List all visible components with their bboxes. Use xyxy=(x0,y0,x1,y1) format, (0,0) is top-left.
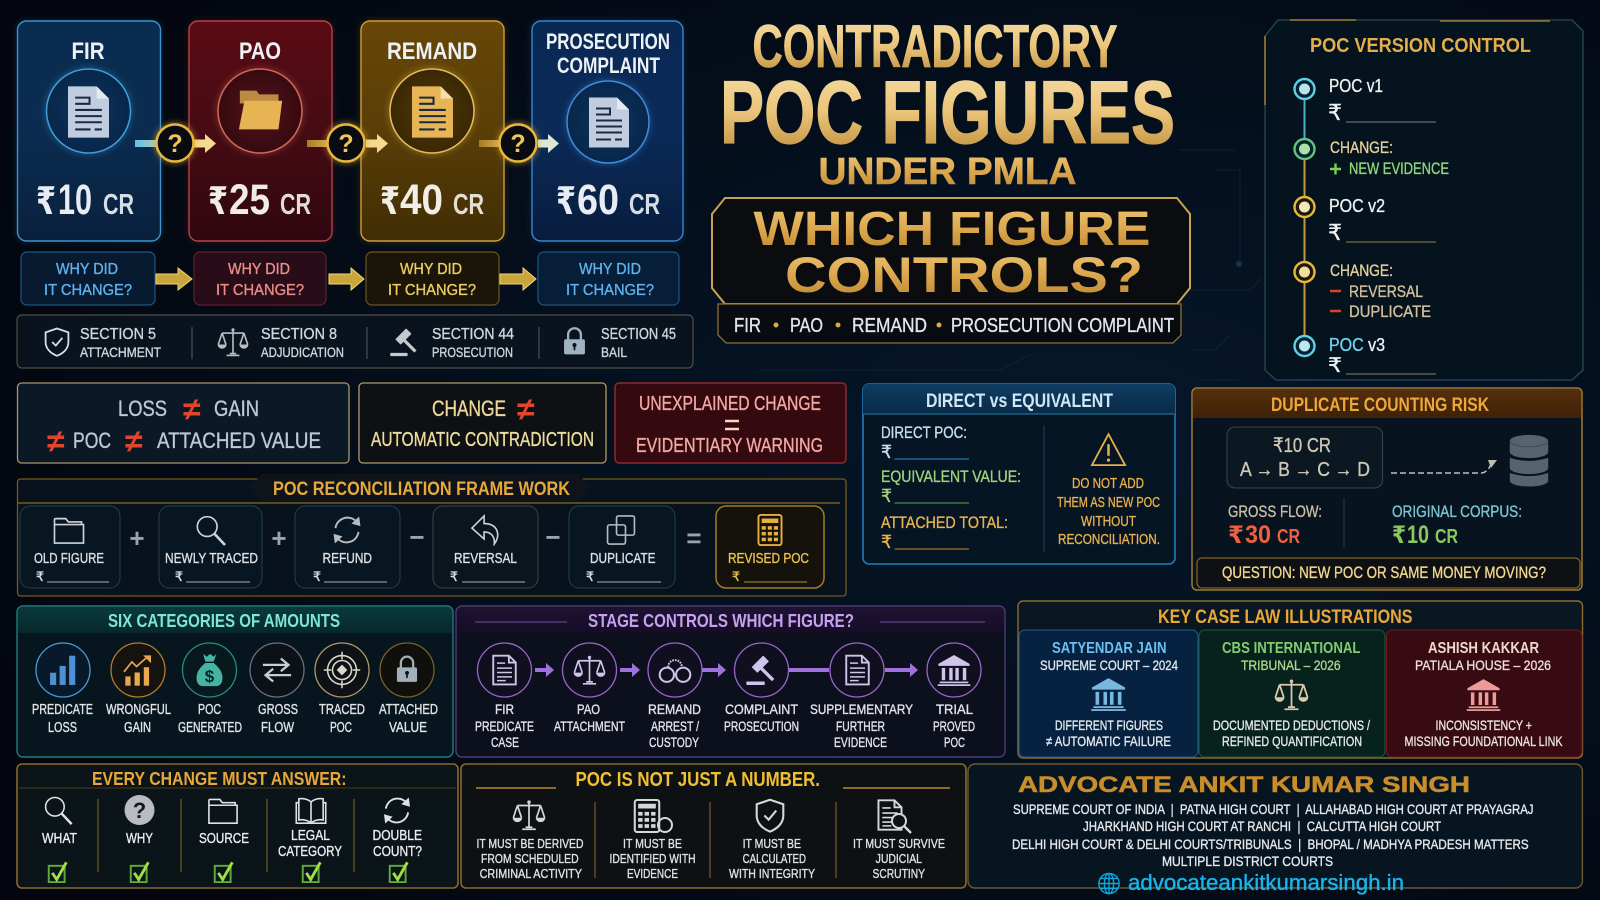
heading: PAO: PAO xyxy=(239,38,281,65)
heading: KEY CASE LAW ILLUSTRATIONS xyxy=(1158,607,1412,628)
case: Satyendar Jain: ≠ AUTOMATIC FAILURE xyxy=(1046,733,1171,749)
item: double count xyxy=(372,797,422,882)
stage: supplementary: SUPPLEMENTARY xyxy=(810,701,914,717)
item: double count: DOUBLE xyxy=(372,827,422,844)
field: direct POC: DIRECT POC: xyxy=(881,423,967,442)
heading: POC VERSION CONTROL xyxy=(1310,35,1531,57)
item: source: SOURCE xyxy=(199,830,249,847)
case: Ashish Kakkar: INCONSISTENCY + xyxy=(1436,717,1532,733)
step: refund: REFUND xyxy=(322,550,372,567)
item: traced POC: TRACED xyxy=(319,702,365,718)
box: loss gain: ≠ xyxy=(125,423,143,459)
operators: − xyxy=(409,522,425,552)
heading: prosecution complaint xyxy=(546,29,670,78)
why box: REMAND: WHY DID xyxy=(400,261,462,278)
step: old figure: OLD FIGURE xyxy=(34,550,104,567)
arrow: why 2 xyxy=(329,268,364,290)
gross flow: 30 xyxy=(1245,521,1271,549)
section 5: ATTACHMENT xyxy=(80,345,161,360)
heading: prosecution complaint: PROSECUTION xyxy=(546,29,670,54)
entry: change reversal duplicate: DUPLICATE xyxy=(1349,302,1431,321)
courts list: JHARKHAND HIGH COURT AT RANCHI | CALCUTTA HIGH COURT xyxy=(1083,818,1441,834)
amount: 25 CR xyxy=(208,176,311,224)
why box: PAO: IT CHANGE? xyxy=(216,282,304,299)
item: derived xyxy=(476,800,584,881)
amount: 60 CR: 60 xyxy=(577,176,619,224)
stage: complaint xyxy=(724,643,799,734)
item: legal category xyxy=(278,799,342,882)
original corpus: ₹ xyxy=(1392,522,1406,549)
stage: FIR xyxy=(475,643,534,750)
step: reversal: ₹ xyxy=(450,569,458,584)
box: loss gain: ≠ xyxy=(183,391,201,427)
stage: PAO xyxy=(554,643,625,734)
why box: PAO xyxy=(194,252,326,305)
entry: v1 xyxy=(1328,76,1436,125)
item: scrutiny: IT MUST SURVIVE xyxy=(853,836,945,851)
step: refund xyxy=(295,506,400,588)
why box: complaint xyxy=(538,252,679,305)
item: calculated: IT MUST BE xyxy=(743,836,801,851)
panel: direct vs equivalent xyxy=(863,384,1175,564)
amount: 60 CR: ₹ xyxy=(556,181,576,223)
item: identified: IT MUST BE xyxy=(623,836,682,851)
step: old figure: ₹ xyxy=(36,569,44,584)
item: attached value: VALUE xyxy=(389,720,427,736)
heading: REMAND: REMAND xyxy=(387,38,477,65)
amount: 60 CR: CR xyxy=(629,189,660,221)
arrow: why 1 xyxy=(156,268,192,290)
box: loss gain xyxy=(18,383,349,463)
step: reversal: REVERSAL xyxy=(454,550,517,567)
amount: 10 CR: CR xyxy=(103,189,134,221)
item: what: WHAT xyxy=(42,830,77,847)
icon: database xyxy=(1510,435,1548,486)
arrow: why 3 xyxy=(500,268,536,290)
item: calculated: CALCULATED xyxy=(743,851,806,866)
stage: supplementary xyxy=(810,643,914,750)
title: POC FIGURES xyxy=(720,62,1175,162)
section 45: BAIL xyxy=(601,345,627,360)
original corpus xyxy=(1392,502,1522,549)
icon: warning xyxy=(1092,434,1125,465)
box: loss gain: ATTACHED VALUE xyxy=(157,428,321,453)
stage: FIR: FIR xyxy=(495,701,514,717)
entry: v2 xyxy=(1328,196,1436,245)
node change 2 xyxy=(1294,262,1314,282)
entry: change new evidence: NEW EVIDENCE xyxy=(1349,159,1449,178)
item: POC generated: POC xyxy=(198,702,221,718)
step: refund: ₹ xyxy=(313,569,321,584)
amount: 40 CR xyxy=(380,176,484,224)
operators: − xyxy=(545,522,561,552)
item: why xyxy=(124,795,154,882)
step: newly traced: NEWLY TRACED xyxy=(165,550,258,567)
item: POC generated: GENERATED xyxy=(178,720,242,736)
flow box xyxy=(1227,427,1382,488)
item: identified: EVIDENCE xyxy=(627,866,678,881)
item: wrongful gain: WRONGFUL xyxy=(106,702,171,718)
box: evidentiary warning: UNEXPLAINED CHANGE xyxy=(639,393,821,415)
stage: remand xyxy=(648,643,702,750)
gross flow: GROSS FLOW: xyxy=(1228,502,1322,521)
warning note: RECONCILIATION. xyxy=(1058,531,1160,548)
warning note: THEM AS NEW POC xyxy=(1057,494,1160,511)
section 8 xyxy=(218,326,344,360)
case: CBS International: CBS INTERNATIONAL xyxy=(1222,640,1361,657)
stage strip: PROSECUTION COMPLAINT xyxy=(951,315,1174,337)
title xyxy=(720,13,1175,193)
item: identified xyxy=(610,800,696,881)
card: REMAND xyxy=(361,21,504,241)
item: POC generated: $ xyxy=(205,667,215,686)
box: evidentiary warning: EVIDENTIARY WARNING xyxy=(636,435,823,457)
heading: DIRECT vs EQUIVALENT xyxy=(926,391,1113,412)
panel: advocate xyxy=(968,764,1582,895)
entry: change reversal duplicate xyxy=(1330,261,1431,321)
why box: PAO: WHY DID xyxy=(228,261,290,278)
flow box: ₹10 CR xyxy=(1273,435,1331,457)
box: change not contradiction: ≠ xyxy=(517,391,535,427)
amount: 10 CR xyxy=(36,176,134,224)
item: POC generated xyxy=(178,643,242,736)
case: Ashish Kakkar xyxy=(1386,630,1582,757)
stage: remand: CUSTODY xyxy=(649,735,699,750)
entry: v3: POC v3 xyxy=(1329,335,1385,355)
stage: remand: ARREST / xyxy=(651,719,699,734)
icon: document in blue ring xyxy=(567,81,649,163)
item: what xyxy=(42,797,77,882)
case: Satyendar Jain xyxy=(1019,630,1198,757)
item: calculated xyxy=(729,800,815,881)
entry: v2: ₹ xyxy=(1328,220,1342,245)
gross flow xyxy=(1228,502,1322,549)
icon: folder in ring xyxy=(218,69,302,153)
title: UNDER PMLA xyxy=(818,151,1076,193)
stage: complaint: COMPLAINT xyxy=(725,701,798,717)
stage: trial: POC xyxy=(944,735,965,750)
item: identified: IDENTIFIED WITH xyxy=(610,851,696,866)
dashed arrow xyxy=(1391,460,1497,473)
stage: FIR: PREDICATE xyxy=(475,719,534,734)
stage: supplementary: FURTHER xyxy=(836,719,885,734)
item: legal category: LEGAL xyxy=(291,827,330,844)
heading: POC IS NOT JUST A NUMBER. xyxy=(576,769,820,791)
field: attached total xyxy=(881,513,1008,552)
item: traced POC xyxy=(315,643,369,736)
operators: + xyxy=(129,523,145,553)
question banner: CONTROLS? xyxy=(785,247,1143,303)
gross flow: ₹ xyxy=(1228,522,1244,549)
step: revised POC xyxy=(716,506,824,588)
icon: document in ring xyxy=(46,69,130,153)
why box: FIR xyxy=(21,252,155,305)
item: gross flow xyxy=(250,643,304,736)
item: derived: CRIMINAL ACTIVITY xyxy=(480,866,582,881)
why box: complaint: IT CHANGE? xyxy=(566,282,654,299)
courts list xyxy=(1012,801,1534,869)
section 44: PROSECUTION xyxy=(432,345,513,360)
heading: DUPLICATE COUNTING RISK xyxy=(1271,395,1489,416)
entry: change new evidence xyxy=(1330,138,1449,178)
stage strip: PAO xyxy=(790,315,823,337)
item: derived: FROM SCHEDULED xyxy=(481,851,579,866)
stage: trial xyxy=(927,643,981,750)
stage: remand: REMAND xyxy=(648,701,701,717)
warning note: WITHOUT xyxy=(1081,513,1136,530)
entry: v1: POC v1 xyxy=(1329,76,1383,96)
stage: trial: TRIAL xyxy=(936,701,973,717)
question banner xyxy=(712,198,1190,304)
item: traced POC: POC xyxy=(330,720,352,736)
item: double count: COUNT? xyxy=(373,843,422,860)
box: loss gain: LOSS xyxy=(118,396,167,421)
step: reversal xyxy=(433,506,538,588)
panel: POC is not just a number xyxy=(461,764,966,888)
amount: 25 CR: 25 xyxy=(229,176,270,224)
warning note xyxy=(1057,475,1160,548)
panel: POC reconciliation framework xyxy=(18,474,846,596)
case: Satyendar Jain: SATYENDAR JAIN xyxy=(1052,640,1166,657)
item: why: WHY xyxy=(126,830,153,847)
item: gross flow: FLOW xyxy=(261,720,294,736)
case: Ashish Kakkar: ASHISH KAKKAR xyxy=(1428,640,1539,657)
title: CONTRADICTORY xyxy=(752,13,1118,80)
step: newly traced xyxy=(159,506,262,588)
amount: 25 CR: CR xyxy=(280,189,311,221)
field: equivalent value: EQUIVALENT VALUE: xyxy=(881,467,1021,486)
panel: key case law xyxy=(1018,601,1582,758)
website: advocateankitkumarsingh.in xyxy=(1128,870,1404,895)
section 5: SECTION 5 xyxy=(80,326,156,343)
item: predicate loss xyxy=(32,643,93,736)
section 45: SECTION 45 xyxy=(601,326,676,343)
arrow: FIR to PAO with question: ? xyxy=(167,130,183,158)
flow box: A → B → C → D xyxy=(1240,459,1370,481)
stage arrows xyxy=(535,663,918,677)
heading: POC RECONCILIATION FRAME WORK xyxy=(273,479,570,500)
field: attached total: ATTACHED TOTAL: xyxy=(881,513,1008,532)
amount: 10 CR: ₹ xyxy=(36,181,56,223)
box: loss gain: POC xyxy=(73,428,111,453)
box: loss gain: ≠ xyxy=(47,423,65,459)
entry: v1: ₹ xyxy=(1328,100,1342,125)
stage: FIR: CASE xyxy=(491,735,519,750)
step: revised POC: REVISED POC xyxy=(728,550,809,567)
arrow: PAO to REMAND with question: ? xyxy=(338,130,354,158)
entry: v2: POC v2 xyxy=(1329,196,1385,216)
stage: complaint: PROSECUTION xyxy=(724,719,799,734)
entry: change reversal duplicate: CHANGE: xyxy=(1330,261,1393,280)
panel: every change must answer xyxy=(17,764,458,888)
arrow: FIR to PAO with question xyxy=(135,122,216,164)
step: duplicate: ₹ xyxy=(586,569,594,584)
card: prosecution complaint xyxy=(532,21,683,241)
section 8: ADJUDICATION xyxy=(261,345,344,360)
heading xyxy=(250,474,590,501)
case: CBS International: TRIBUNAL – 2026 xyxy=(1241,657,1341,673)
original corpus: ORIGINAL CORPUS: xyxy=(1392,502,1522,521)
why box: complaint: WHY DID xyxy=(579,261,641,278)
entry: v3: ₹ xyxy=(1328,355,1342,377)
case: CBS International: REFINED QUANTIFICATION xyxy=(1222,733,1362,749)
stage: trial: PROVED xyxy=(933,719,975,734)
item: scrutiny: SCRUTINY xyxy=(872,866,925,881)
stage: PAO: PAO xyxy=(577,701,600,717)
question banner: WHICH FIGURE xyxy=(754,203,1150,256)
section 5 xyxy=(46,326,161,360)
courts list: MULTIPLE DISTRICT COURTS xyxy=(1162,853,1333,869)
case: CBS International: DOCUMENTED DEDUCTIONS / xyxy=(1213,717,1370,733)
case: Ashish Kakkar: PATIALA HOUSE – 2026 xyxy=(1415,657,1551,673)
amount: 60 CR xyxy=(556,176,660,224)
stage strip: REMAND xyxy=(852,315,927,337)
advocate name: ADVOCATE ANKIT KUMAR SINGH xyxy=(1018,772,1470,797)
box: loss gain: GAIN xyxy=(214,396,259,421)
case: CBS International xyxy=(1199,630,1385,757)
item: why: ? xyxy=(133,798,146,823)
card: FIR xyxy=(17,21,160,241)
timeline xyxy=(1294,79,1314,356)
panel: POC version control xyxy=(1265,20,1583,380)
step: revised POC: ₹ xyxy=(732,569,740,584)
arrow: PAO to REMAND with question xyxy=(307,122,388,164)
why box: REMAND xyxy=(366,252,499,305)
step: newly traced: ₹ xyxy=(175,569,183,584)
heading: SIX CATEGORIES OF AMOUNTS xyxy=(108,611,340,631)
icon: gold document in ring xyxy=(390,69,474,153)
item: calculated: WITH INTEGRITY xyxy=(729,866,815,881)
item: scrutiny xyxy=(853,800,945,881)
box: change not contradiction: CHANGE xyxy=(432,396,506,421)
heading: EVERY CHANGE MUST ANSWER: xyxy=(92,769,346,789)
field: direct POC: ₹ xyxy=(881,442,892,462)
heading: prosecution complaint: COMPLAINT xyxy=(557,53,660,78)
stage: PAO: ATTACHMENT xyxy=(554,719,625,734)
item: wrongful gain: GAIN xyxy=(124,720,151,736)
operators: + xyxy=(271,523,287,553)
field: equivalent value xyxy=(881,467,1021,506)
gross flow: CR xyxy=(1277,526,1300,548)
step: old figure xyxy=(20,506,120,588)
heading: STAGE CONTROLS WHICH FIGURE? xyxy=(588,611,854,631)
section 44 xyxy=(390,326,514,360)
panel: duplicate counting risk xyxy=(1192,388,1582,590)
entry: v3 xyxy=(1328,335,1436,377)
section 45 xyxy=(564,326,676,360)
step: duplicate: DUPLICATE xyxy=(590,550,656,567)
box: evidentiary warning xyxy=(615,383,846,463)
stage strip: FIR xyxy=(734,315,761,337)
entry: change new evidence: CHANGE: xyxy=(1330,138,1393,157)
original corpus: CR xyxy=(1435,526,1458,548)
item: predicate loss: LOSS xyxy=(48,720,77,736)
arrow: REMAND to complaint with question: ? xyxy=(510,130,526,158)
arrow: REMAND to complaint with question xyxy=(479,122,559,164)
amount: 10 CR: 10 xyxy=(58,176,92,224)
case: Satyendar Jain: DIFFERENT FIGURES xyxy=(1055,717,1163,733)
stage strip xyxy=(718,304,1181,343)
node v2 xyxy=(1294,197,1314,217)
item: attached value xyxy=(379,643,438,736)
field: direct POC xyxy=(881,423,969,462)
item: wrongful gain xyxy=(106,643,171,736)
section 44: SECTION 44 xyxy=(432,326,514,343)
why box: FIR: IT CHANGE? xyxy=(44,282,132,299)
node v1 xyxy=(1294,79,1314,99)
question strip xyxy=(1197,558,1580,588)
box: change not contradiction xyxy=(359,383,606,463)
step: duplicate xyxy=(569,506,675,588)
original corpus: 10 xyxy=(1407,521,1429,549)
item: legal category: CATEGORY xyxy=(278,843,342,860)
amount: 40 CR: CR xyxy=(453,189,484,221)
heading: FIR: FIR xyxy=(72,38,104,65)
why box: REMAND: IT CHANGE? xyxy=(388,282,476,299)
panel: stage controls which figure xyxy=(456,606,1005,757)
field: equivalent value: ₹ xyxy=(881,486,892,506)
item: derived: IT MUST BE DERIVED xyxy=(476,836,584,851)
section bar xyxy=(17,315,693,368)
item: source xyxy=(199,799,249,882)
card: PAO xyxy=(189,21,332,241)
stage: supplementary: EVIDENCE xyxy=(834,735,887,750)
case: Satyendar Jain: SUPREME COURT – 2024 xyxy=(1040,657,1178,673)
panel: six categories of amounts xyxy=(17,606,453,757)
amount: 40 CR: ₹ xyxy=(380,181,400,223)
amount: 25 CR: ₹ xyxy=(208,181,228,223)
box: change not contradiction: AUTOMATIC CONTRADICTION xyxy=(371,429,594,451)
item: scrutiny: JUDICIAL xyxy=(876,851,922,866)
node change 1 xyxy=(1294,139,1314,159)
operators: = xyxy=(686,523,702,553)
field: attached total: ₹ xyxy=(881,532,892,552)
entry: change reversal duplicate: REVERSAL xyxy=(1349,282,1423,301)
item: gross flow: GROSS xyxy=(258,702,298,718)
section 8: SECTION 8 xyxy=(261,326,337,343)
item: predicate loss: PREDICATE xyxy=(32,702,93,718)
item: attached value: ATTACHED xyxy=(379,702,438,718)
amount: 40 CR: 40 xyxy=(400,176,443,224)
node v3 xyxy=(1294,336,1314,356)
operators xyxy=(129,522,702,553)
warning note: DO NOT ADD xyxy=(1072,475,1144,492)
why box: FIR: WHY DID xyxy=(56,261,118,278)
